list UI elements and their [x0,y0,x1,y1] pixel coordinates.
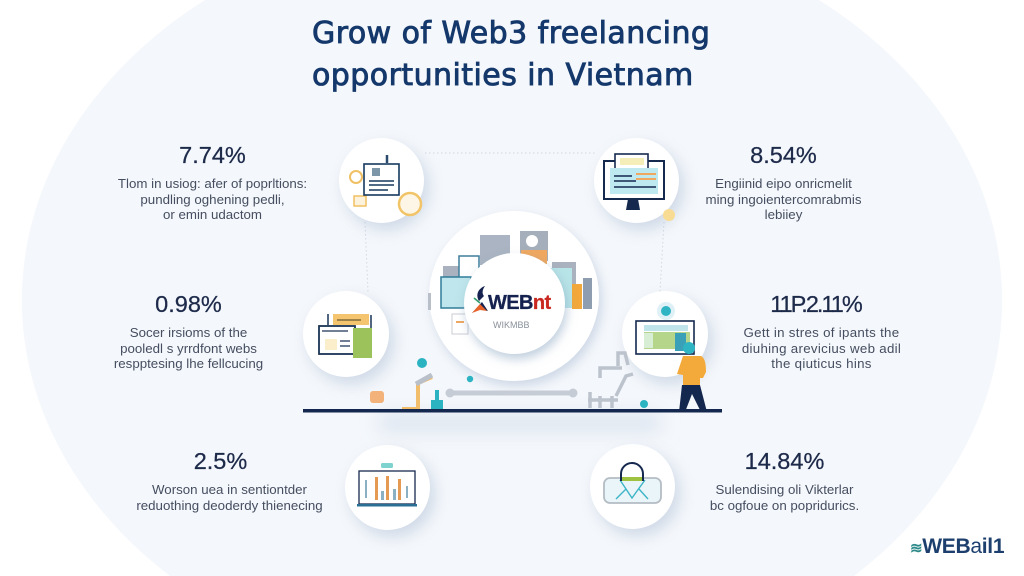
stat: bottom right: 14.84% [745,448,824,474]
stat: top right: Engiinid eipo onricmelit [715,176,852,191]
stat: middle left: pooledl s yrrdfont webs [120,340,257,356]
stat: middle right [742,291,901,371]
stat: top right: ming ingoientercomrabmis [706,192,861,206]
central hub ring [429,211,599,381]
stat: bottom left [136,448,323,512]
stat: top right: lebiiey [765,207,802,222]
stat: bottom left: 2.5% [194,448,247,474]
stat: middle left: respptesing lhe fellcucing [114,356,263,371]
icon circle: layout panels [303,291,389,377]
stat: bottom right: Sulendising oli Vikterlar [716,482,853,497]
logo text: WEBnt [488,292,551,314]
stat: top left: or emin udactom [163,207,262,222]
icon circle: monitor [594,138,679,223]
footer logo: ≋WEBail1 [910,535,1004,558]
central logo circle [464,253,565,354]
stat: top left [118,142,307,222]
stat: top left: 7.74% [179,142,246,168]
stat: middle right: Gett in stres of ipants the [744,325,899,340]
stat: bottom right [710,448,859,512]
title [312,16,710,93]
icon circle: screen [622,291,708,377]
icon circle: bar chart [345,445,430,530]
icon circle: document [339,138,424,223]
stat: bottom right: bc ogfoue on popridurics. [710,498,859,512]
stat: middle right: the qiuticus hins [771,356,872,371]
stat: top right: 8.54% [750,142,817,168]
stat: middle right: 11P.2.11% [770,291,861,317]
title: opportunities in Vietnam [312,58,694,93]
stat: bottom left: reduothing deoderdy thienecing [136,498,323,512]
stat: top left: Tlom in usiog: afer of poprltions: [118,176,307,191]
stat: top right [706,142,861,222]
stat: middle right: diuhing arevicius web adil [742,340,901,356]
logo subtitle: WIKMBB [493,320,530,330]
stat: middle left [114,291,263,371]
icon circle: envelope [590,444,675,529]
stat: bottom left: Worson uea in sentiontder [152,482,307,497]
stat: top left: pundling oghening pedli, [140,192,285,206]
stat: middle left: Socer irsioms of the [130,325,247,340]
title: Grow of Web3 freelancing [312,16,710,51]
stat: middle left: 0.98% [155,291,222,317]
